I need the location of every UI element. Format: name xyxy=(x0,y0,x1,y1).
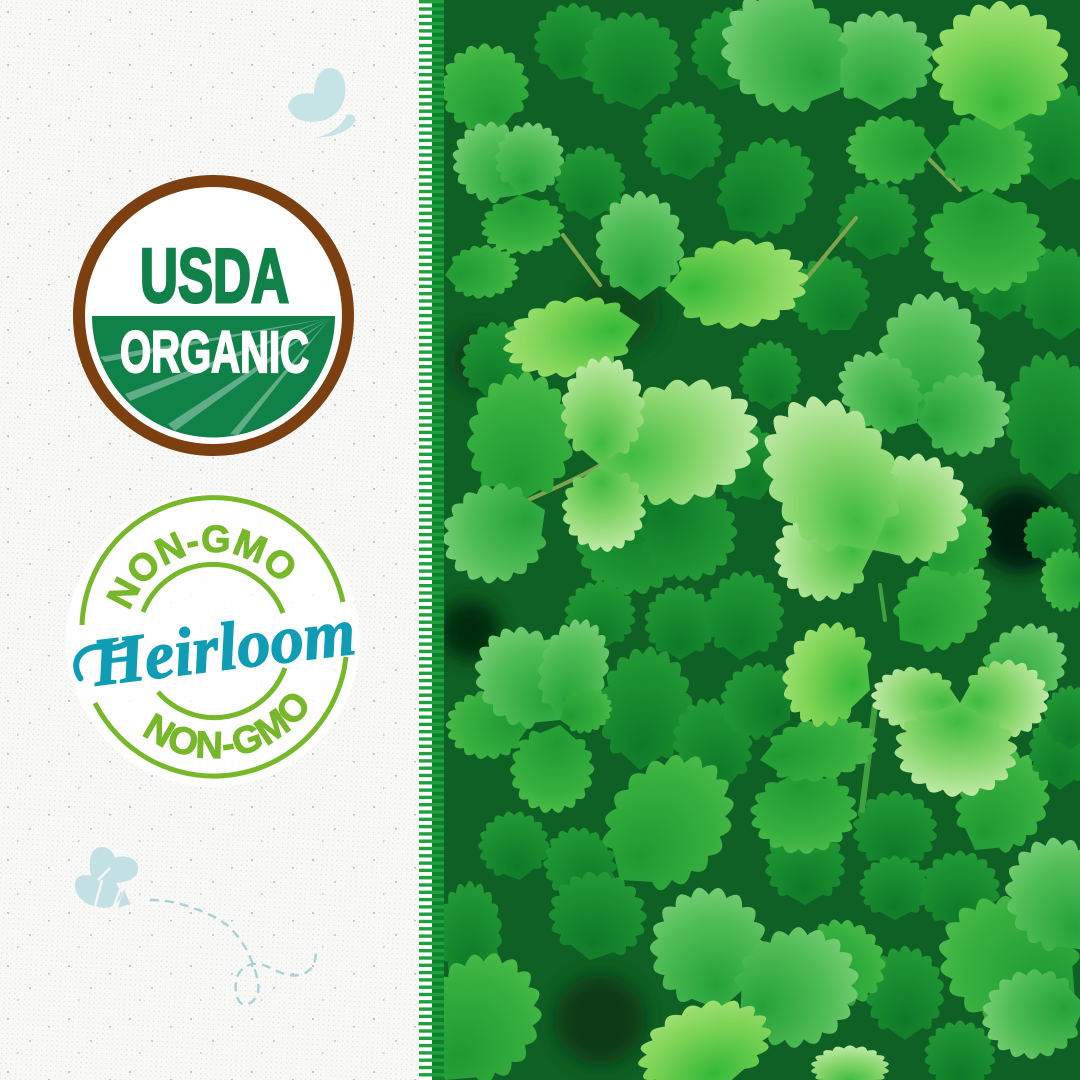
script wordmark: Heirloom xyxy=(87,593,359,701)
bottom label: NON-GMO xyxy=(142,694,308,759)
centre pale leaf xyxy=(426,354,774,600)
stems xyxy=(515,150,960,810)
icon: butterfly xyxy=(288,68,355,138)
badge: Heirloom Non-GMO xyxy=(66,493,360,787)
bottom leaf cluster xyxy=(575,729,1080,1080)
top leaf cluster xyxy=(697,0,1068,294)
dark background leaves xyxy=(395,0,1080,1080)
badge white backing xyxy=(66,493,360,787)
USDA wordmark: USDA xyxy=(140,234,289,319)
panel: linen background xyxy=(0,0,420,1080)
upper-left leaf cluster xyxy=(436,105,812,387)
right pale leaf xyxy=(736,287,1017,672)
green field semicircle xyxy=(92,316,335,438)
top label: NON-GMO xyxy=(106,524,294,610)
photo background xyxy=(444,0,1080,1080)
left lower leaf cluster xyxy=(446,607,620,820)
badge ring xyxy=(79,181,348,450)
badge: USDA Organic xyxy=(79,181,348,450)
dashed flight path xyxy=(150,900,316,1004)
photo: cilantro leaves xyxy=(395,0,1080,1080)
icon: bee with dashed trail xyxy=(75,847,316,1004)
ORGANIC wordmark: ORGANIC xyxy=(120,320,309,385)
stitched green edge xyxy=(419,0,444,1080)
outer rings xyxy=(82,498,346,776)
shadow foliage layer xyxy=(440,270,1062,1065)
lower right pale leaf xyxy=(747,606,1080,859)
field rays xyxy=(100,318,330,435)
